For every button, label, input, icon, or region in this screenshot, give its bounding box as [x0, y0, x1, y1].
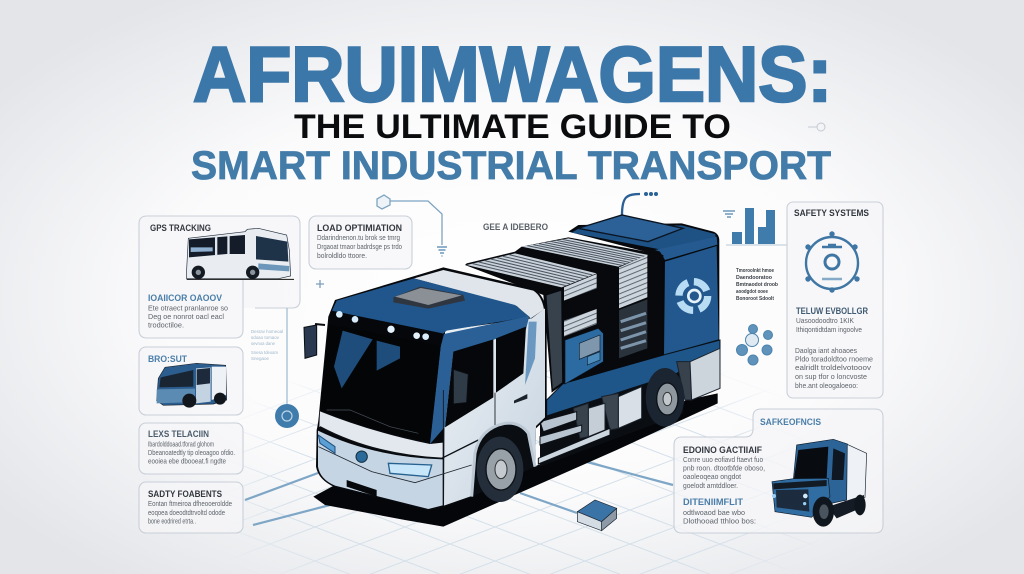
- faint text block: sevnoa dane: [251, 341, 275, 346]
- panel: product: [139, 347, 243, 415]
- floor grid: [240, 370, 800, 574]
- rack frame: [465, 237, 663, 393]
- side windows: [445, 327, 526, 427]
- body text: Drgaoat tmaor badrdsge ps trdo: [317, 244, 402, 251]
- body text: Ete otraect pranlanroe so: [148, 306, 228, 312]
- panel: safeguards: [674, 409, 883, 533]
- icon: gear logo: [679, 282, 708, 310]
- rack face 2: [619, 255, 647, 308]
- side lockers: [573, 387, 642, 438]
- panel: load optimisation: [309, 216, 412, 269]
- panel: GPS tracking: [139, 216, 300, 338]
- cab silhouette: [316, 267, 547, 511]
- small text block: Bonoroot Sdoolt: [736, 296, 774, 302]
- rack top 2: [522, 238, 648, 267]
- body text: Uasoodoodtro 1KIK: [796, 318, 854, 325]
- body text: [148, 306, 228, 330]
- roof hatch: [393, 287, 465, 309]
- small text block: Bmtnaodot droob: [736, 282, 779, 288]
- cargo racks: [465, 237, 663, 393]
- panel: lexs telacin: [139, 423, 243, 474]
- faint text block: Desrav homeoal: [251, 329, 283, 334]
- body text: Eontan ftmeiroa dfheooeroldde: [148, 501, 232, 508]
- cab roof white: [414, 270, 544, 318]
- heading: BRO:SUT: [148, 354, 187, 365]
- battery module: [577, 500, 617, 531]
- slot: [347, 480, 377, 497]
- headlight right: [388, 463, 432, 477]
- rack post: [546, 290, 563, 390]
- small text block: Daendooratoo: [736, 275, 773, 281]
- icon: hexagon: [377, 195, 390, 209]
- body text: [683, 510, 756, 526]
- pale blue patch: [525, 322, 537, 385]
- body text: Ibardolddoaad.tforad glohom: [148, 442, 214, 448]
- body text: Daolga iant ahoaoes: [795, 348, 857, 355]
- door mirror: [453, 369, 468, 404]
- LED light bar: [329, 311, 443, 347]
- subheading blue: DITENIIMFLIT: [683, 497, 743, 508]
- front bumper: [318, 411, 478, 509]
- small text block: aoodgdot ooee: [736, 289, 768, 295]
- body text: Deg oe nonrot oacl eacl: [148, 314, 224, 321]
- connector from GPS panel to node: [275, 308, 299, 428]
- body text: bolroldldo ttoore.: [317, 253, 367, 260]
- subheading: TELUW EVBOLLGR: [796, 306, 868, 317]
- body text: goelodt amtddloer.: [683, 483, 738, 490]
- body text: [795, 318, 873, 390]
- panel: safety systems: [787, 202, 883, 398]
- dark underside: [540, 367, 683, 467]
- body text: pnb roon. dtootbfde oboso,: [683, 466, 765, 472]
- cab side panel: [444, 308, 545, 506]
- title line 2: THE ULTIMATE GUIDE TO: [294, 108, 731, 146]
- body text: oaoleoqeao ongdot: [683, 474, 741, 481]
- icon: white van: [187, 228, 294, 279]
- rear cargo box: [568, 215, 719, 357]
- panel: safety fragments: [139, 482, 243, 533]
- body text: eoqoea doeodtdtrvoltd odode: [148, 510, 225, 517]
- heading: LEXS TELACIIN: [148, 429, 209, 440]
- cable dots: [644, 192, 658, 196]
- body text: trodoctiloe.: [148, 322, 184, 330]
- cab roof blue: [332, 278, 529, 334]
- rack face 1: [564, 274, 597, 301]
- body text: ealridlt troldelvotooov: [795, 365, 872, 372]
- icon: safety gauge: [805, 231, 860, 293]
- faint text block: Snegaoe: [251, 356, 269, 361]
- heading: SAFKEOFNCIS: [760, 417, 821, 428]
- rear locker: [677, 348, 720, 400]
- icon: wifi: [437, 247, 447, 256]
- lower band: [318, 431, 443, 509]
- outer side mirror: [304, 324, 325, 358]
- connector with hexagon and wifi icon: [377, 195, 447, 256]
- body text: [317, 235, 402, 260]
- heading: load optimisation: LOAD OPTIMIATION: [317, 223, 402, 234]
- body text: Pldo toradoldtoo rnoeme: [795, 356, 873, 364]
- heading: safety systems: SAFETY SYSTEMS: [794, 208, 869, 219]
- icon: blue truck: [772, 439, 867, 527]
- icon: component cluster: [736, 324, 772, 365]
- small text block: [736, 268, 779, 302]
- icon: node circle: [275, 404, 299, 428]
- body text: Conre uuo eofiavd ftaevt fuo: [683, 457, 763, 464]
- rack top 1: [467, 253, 597, 287]
- bar chart icon: [723, 208, 787, 245]
- body text: Dlothooad tthloo bos:: [683, 518, 756, 526]
- body text: bhe.ant oleogaloeoo:: [795, 383, 858, 390]
- cargo lid: [578, 215, 683, 242]
- windshield: [320, 324, 441, 442]
- body text: bone eodrired etrta..: [148, 518, 196, 526]
- body text: [683, 457, 765, 490]
- body text: Ddarindnenon.tu brok se tmrg: [317, 235, 400, 242]
- icon: plus: [316, 280, 324, 288]
- faint text block: Snesa tdeoam: [251, 350, 278, 355]
- faint text block: [251, 329, 283, 361]
- body text: Dbeanoatedtly tip oleoagoo ofdio.: [148, 450, 235, 457]
- side steps: [538, 412, 610, 464]
- body text: odtlwoaod bae wbo: [683, 510, 745, 517]
- heading: SADTY FOABENTS: [148, 489, 222, 500]
- main truck illustration: [304, 194, 720, 531]
- heading: GPS tracking: GPS TRACKING: [150, 223, 211, 234]
- label above truck: GEE A IDEBERO: [483, 222, 548, 232]
- small text block: Tmoroolnkt hmoe: [736, 268, 774, 274]
- icon: blue van: [157, 363, 227, 408]
- door lines and handle: [443, 390, 527, 506]
- badge: [356, 451, 367, 462]
- truck shadow: [313, 393, 718, 527]
- body text: Ithiqontidtdam ingoolve: [796, 327, 862, 334]
- rear wheel: [646, 368, 684, 427]
- blue control unit: [565, 328, 603, 384]
- body text: eooiea ebe dbooeat.fi ngdte: [148, 458, 226, 466]
- cable on cargo lid: [622, 194, 640, 215]
- title line 3: SMART INDUSTRIAL TRANSPORT: [191, 144, 831, 188]
- title: [191, 30, 832, 188]
- headlight left: [318, 435, 335, 453]
- faint text block: sdoao tomaov: [251, 335, 280, 340]
- subheading: IOAIICOR OAOOV: [148, 293, 223, 304]
- title line 1: AFRUIMWAGENS:: [193, 30, 832, 118]
- body text: [148, 501, 232, 526]
- front wheel: [472, 423, 535, 502]
- body text: on sup tfor o loncvoste: [795, 374, 867, 381]
- chassis rail: [547, 340, 720, 416]
- icon: small ring beside title: [808, 123, 825, 131]
- upper band: [319, 411, 443, 458]
- side blue band: [430, 316, 529, 444]
- subheading: EDOINO GACTIIAIF: [683, 445, 762, 456]
- body text: [148, 442, 235, 466]
